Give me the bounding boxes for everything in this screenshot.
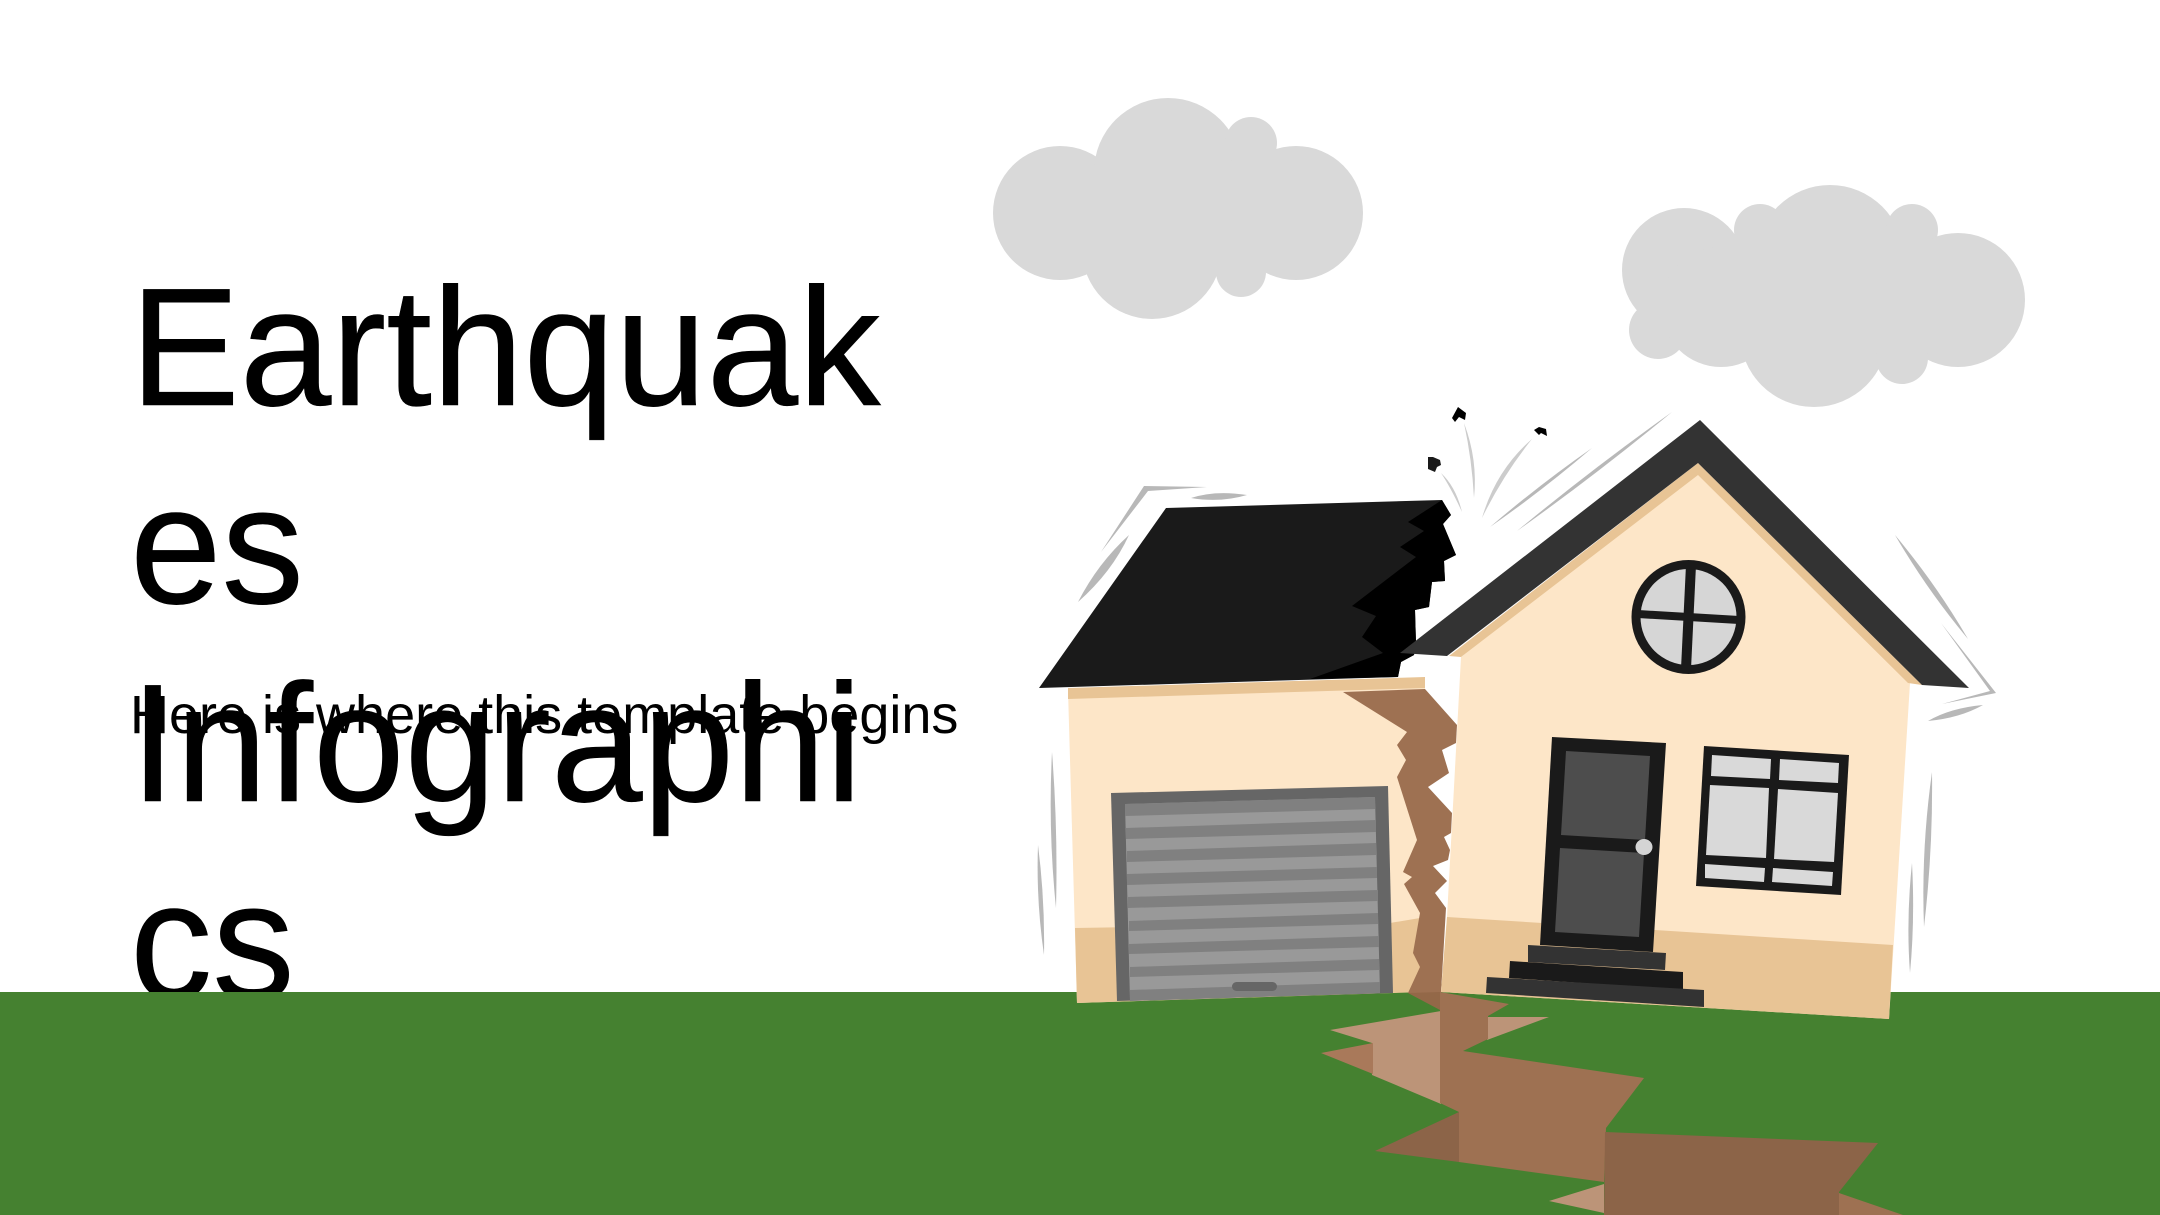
house window — [1696, 746, 1849, 895]
house roof — [1400, 420, 1969, 688]
garage door frame — [1111, 786, 1393, 1001]
title: Infographi — [130, 649, 862, 837]
debris lines — [1441, 423, 1532, 518]
garage fascia — [1068, 677, 1425, 699]
house wall — [1441, 470, 1910, 1019]
round window — [1632, 560, 1746, 674]
garage roof — [1039, 500, 1456, 688]
title — [130, 253, 882, 1035]
garage section — [1039, 500, 1457, 1003]
garage wall — [1068, 680, 1425, 1003]
broken roof edge — [1310, 500, 1456, 679]
garage door shutter — [1125, 797, 1380, 1001]
cloud left — [993, 98, 1363, 319]
shake lines — [1038, 412, 1996, 973]
title: Earthquak — [130, 253, 881, 441]
title: cs — [130, 847, 295, 1035]
ground — [0, 992, 2160, 1215]
house wall base — [1441, 917, 1893, 1019]
main house — [1400, 420, 1969, 1019]
garage wall base — [1075, 918, 1425, 1003]
subtitle: Here is where this template begins — [130, 685, 958, 745]
door knob — [1636, 839, 1652, 855]
front steps — [1486, 945, 1704, 1007]
cloud right — [1622, 185, 2025, 407]
wall crack — [1343, 689, 1457, 993]
roof trim — [1449, 463, 1922, 685]
garage door handle — [1232, 982, 1277, 991]
debris pieces — [1428, 407, 1547, 472]
title: es — [130, 451, 304, 639]
front door — [1540, 737, 1666, 952]
ground crack — [1321, 992, 1903, 1215]
